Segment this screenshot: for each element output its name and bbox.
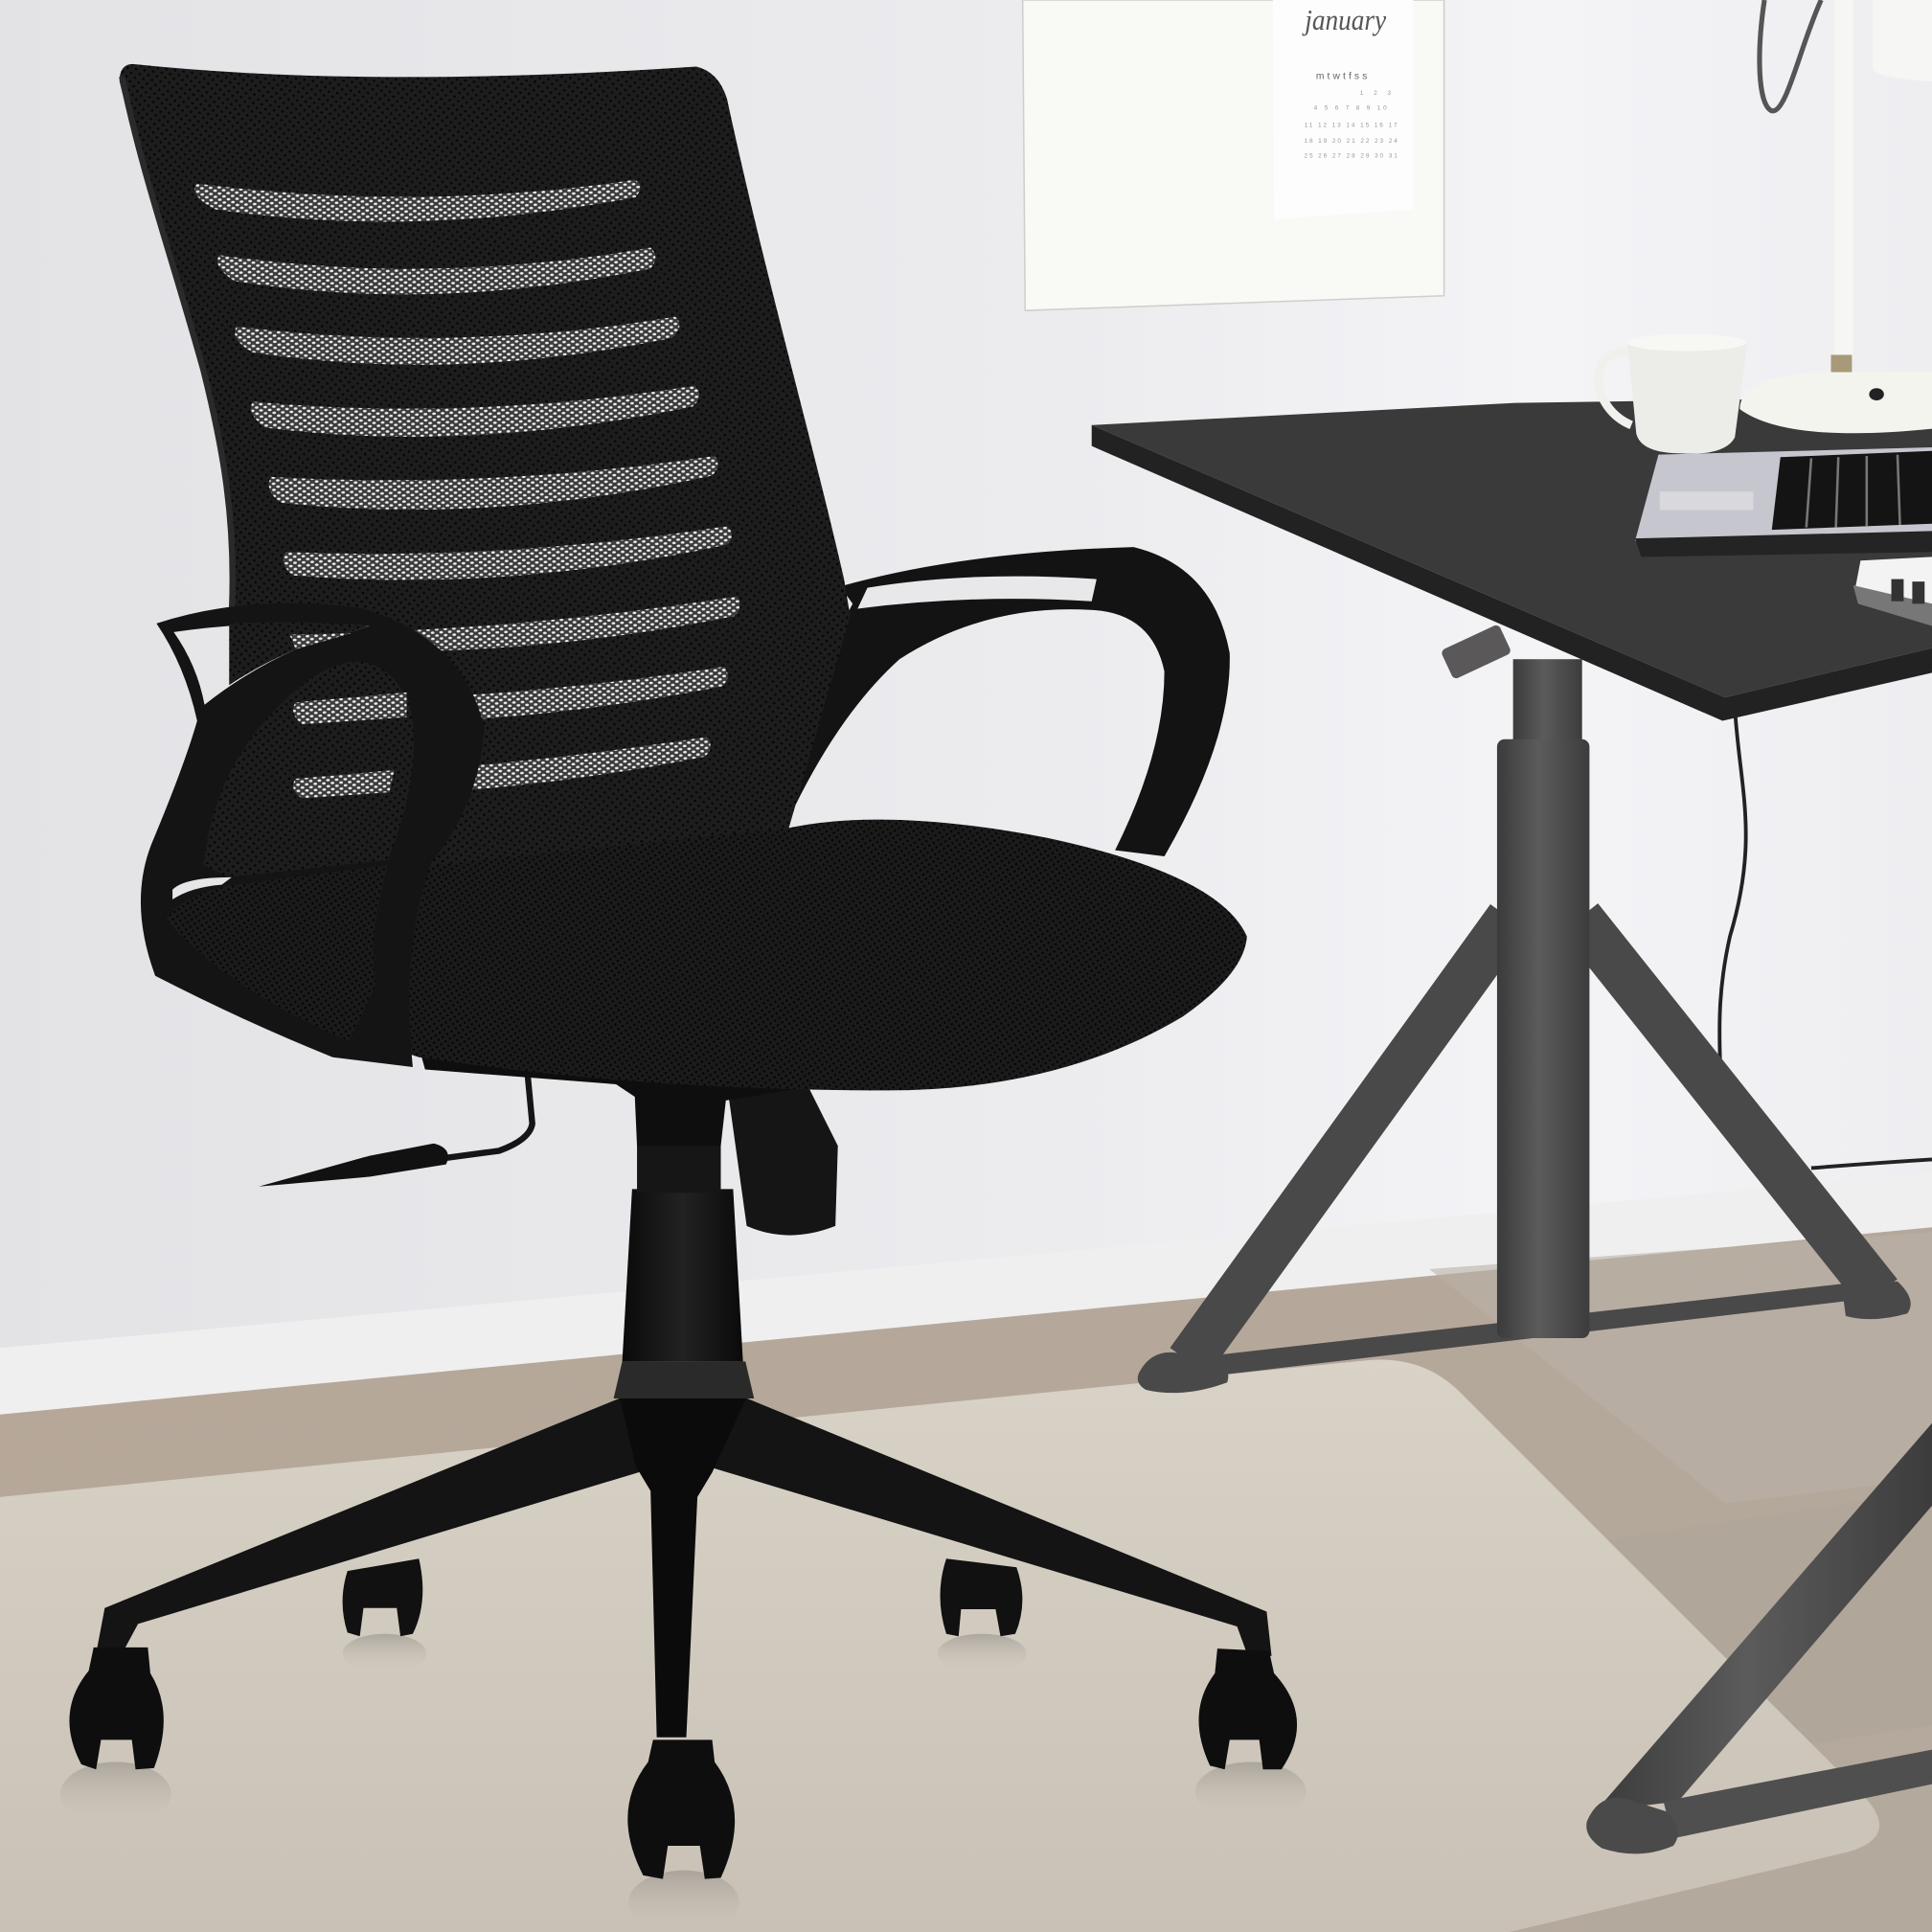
tilt knob bbox=[727, 1084, 838, 1236]
desk foot right bbox=[1842, 1282, 1911, 1319]
seat bbox=[165, 820, 1247, 1090]
front casters bbox=[69, 1648, 1297, 1879]
laptop bbox=[1635, 447, 1932, 557]
under seat mechanism bbox=[419, 1047, 862, 1101]
lamp bbox=[1739, 0, 1932, 433]
desk foot left bbox=[1138, 1352, 1228, 1393]
desk column bbox=[1513, 659, 1582, 745]
armrest window bbox=[173, 624, 370, 705]
calendar days: 11 12 13 14 15 16 17 bbox=[1305, 122, 1399, 128]
desk leg left bbox=[1189, 918, 1510, 1361]
calendar days bbox=[1304, 71, 1399, 160]
calendar days: 4 5 6 7 8 9 10 bbox=[1314, 104, 1390, 111]
desk legs bbox=[1138, 624, 1932, 1853]
wood floor bbox=[0, 1227, 1932, 1932]
calendar days: 25 26 27 28 29 30 31 bbox=[1304, 153, 1399, 160]
wall bbox=[0, 0, 1932, 1417]
floor mat bbox=[0, 1360, 1879, 1932]
caster left bbox=[69, 1648, 164, 1769]
chair bbox=[69, 64, 1297, 1879]
backrest bbox=[120, 64, 851, 899]
desk foot bars bbox=[1214, 1279, 1888, 1375]
power cable bbox=[1719, 709, 1746, 1059]
baseboard bbox=[0, 1173, 1932, 1415]
chair wheel shadows bbox=[60, 1634, 1307, 1932]
caster center bbox=[627, 1739, 735, 1879]
chair base bbox=[96, 1398, 1272, 1738]
tilt handle bbox=[1441, 624, 1512, 680]
mug bbox=[1598, 334, 1747, 454]
wall poster with calendar bbox=[1023, 0, 1444, 310]
near armrest bbox=[141, 603, 485, 1067]
gas lift bbox=[614, 1140, 754, 1398]
calendar days: 1 2 3 bbox=[1360, 90, 1396, 97]
calendar sheet bbox=[1273, 0, 1413, 219]
backrest seen through armrest bbox=[203, 662, 414, 877]
far armrest bbox=[776, 547, 1230, 856]
desk leg right bbox=[1580, 918, 1879, 1294]
height lever bbox=[259, 1072, 533, 1187]
calendar month title: january bbox=[1302, 3, 1386, 36]
notebook on desk bbox=[1853, 557, 1932, 625]
seat seen through armrest bbox=[167, 865, 388, 1041]
back casters bbox=[343, 1558, 1022, 1636]
caster right bbox=[1199, 1648, 1297, 1769]
gap under armrest bbox=[172, 877, 232, 899]
desk top bbox=[1092, 397, 1932, 721]
calendar days: mtwtfss bbox=[1316, 71, 1370, 81]
near desk frame bbox=[1596, 1423, 1932, 1811]
calendar days: 18 19 20 21 22 23 24 bbox=[1304, 138, 1399, 145]
backrest slats bbox=[194, 180, 740, 799]
armrest opening bbox=[857, 577, 1097, 608]
